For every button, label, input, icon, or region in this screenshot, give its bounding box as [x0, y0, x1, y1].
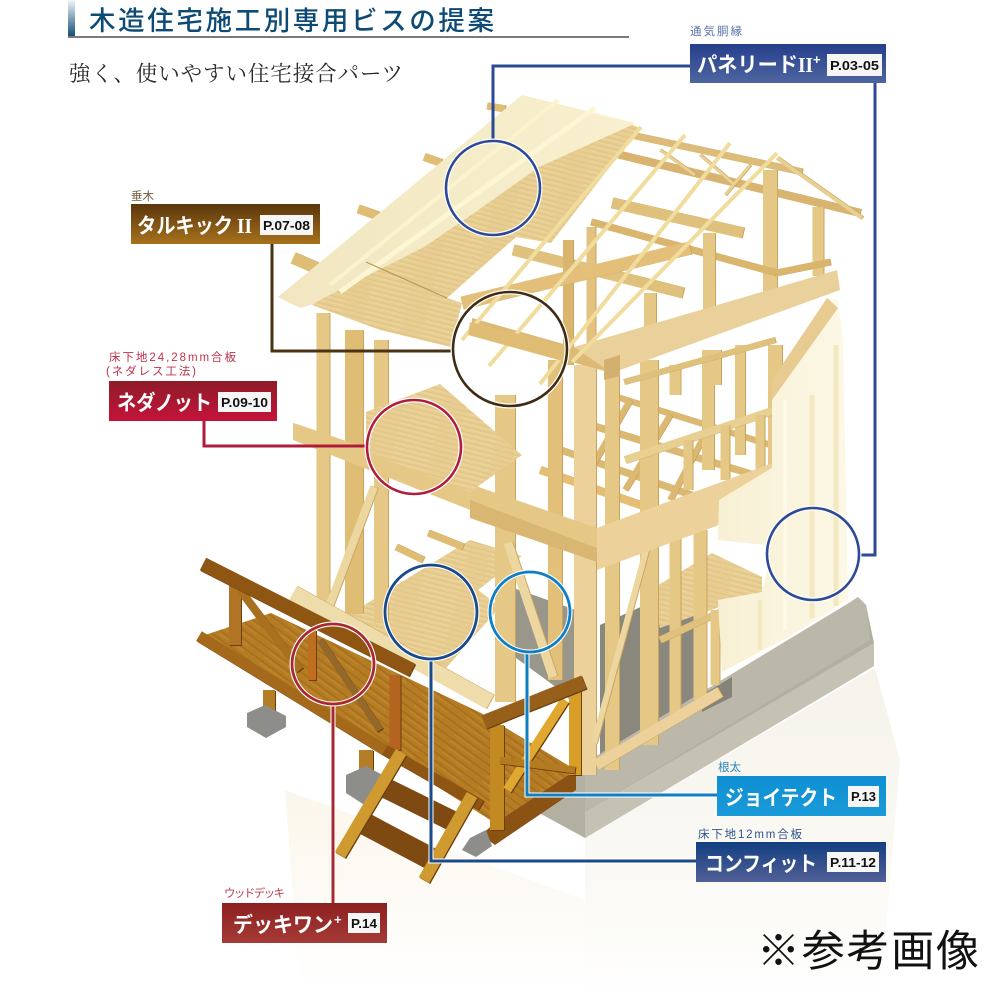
roof	[278, 95, 640, 347]
label: ジョイテクト: 根太	[718, 761, 741, 774]
label: パネリードII+: +	[813, 52, 821, 67]
connector: ジョイテクト	[527, 652, 717, 795]
circle: joists	[490, 572, 570, 652]
connector: デッキワン	[330, 704, 336, 903]
mid-level floor beams	[293, 423, 775, 570]
label: タルキックII: タルキック	[137, 215, 233, 238]
label: ネダノット	[106, 350, 277, 421]
house illustration	[199, 95, 900, 1000]
label: ネダノット: 床下地24,28mm合板	[109, 350, 236, 364]
label: パネリードII+	[690, 24, 886, 83]
label: デッキワン+: P.14	[351, 916, 378, 931]
label: タルキックII: P.07-08	[263, 218, 310, 233]
right wall cladding	[718, 298, 848, 672]
timber frame: back structure	[462, 135, 862, 365]
timber frame: main posts and beams	[293, 313, 775, 775]
label: タルキックII	[131, 190, 320, 244]
deck right railing	[484, 682, 584, 830]
circle: first floor	[385, 565, 477, 659]
label: コンフィット: P.11-12	[830, 855, 876, 870]
label: ネダノット: (ネダレス工法)	[106, 364, 196, 378]
upper perimeter beams	[472, 270, 840, 380]
concrete interior	[505, 585, 700, 755]
callout circles	[292, 141, 859, 704]
subtitle: 強く、使いやすい住宅接合パーツ	[69, 57, 403, 88]
rafters	[462, 127, 777, 384]
foundation	[500, 597, 874, 838]
timber frame: interior joists of the second floor	[540, 395, 770, 512]
circle: roof	[446, 141, 540, 235]
second-floor plywood under red circle	[366, 384, 522, 492]
label: ジョイテクト: ジョイテクト	[725, 787, 837, 810]
label: パネリードII+: 通気胴縁	[690, 24, 742, 38]
label: タルキックII: 垂木	[131, 190, 154, 203]
label: ネダノット: P.09-10	[221, 395, 268, 410]
circle: second floor	[367, 400, 461, 494]
circle: wall	[767, 508, 859, 600]
note: reference image: ※参考画像	[757, 917, 979, 979]
label: パネリードII+: II	[798, 53, 813, 77]
connector: タルキック	[272, 244, 453, 351]
label: コンフィット	[696, 827, 886, 882]
circle: deck	[292, 624, 374, 704]
label: ジョイテクト: P.13	[851, 789, 876, 804]
label: ネダノット: ネダノット	[117, 391, 212, 415]
second-floor right plywood	[650, 553, 762, 628]
connector: ネダノット	[204, 420, 367, 446]
label: コンフィット: コンフィット	[705, 853, 817, 876]
stairs	[340, 752, 472, 880]
label: デッキワン+: ウッドデッキ	[224, 886, 285, 900]
front beam across brown circle	[468, 322, 568, 362]
label: デッキワン+	[222, 886, 387, 943]
wooden deck	[199, 564, 584, 880]
connector: パネリード wall	[858, 83, 875, 555]
connector: コンフィット	[431, 659, 696, 861]
label: コンフィット: 床下地12mm合板	[698, 827, 802, 841]
floor reflection	[285, 668, 900, 1000]
label: デッキワン+: +	[334, 912, 342, 927]
connector lines	[204, 66, 875, 903]
circle: rafters	[453, 292, 567, 406]
label: パネリードII+: パネリード	[697, 54, 798, 77]
label: タルキックII: II	[237, 214, 252, 238]
label: デッキワン+: デッキワン	[233, 913, 333, 937]
label: パネリードII+: P.03-05	[830, 58, 879, 73]
connector: パネリード roof	[493, 66, 690, 141]
label: ジョイテクト	[717, 761, 886, 816]
title: 木造住宅施工別専用ビスの提案	[89, 0, 494, 38]
first-floor plywood	[340, 540, 522, 668]
